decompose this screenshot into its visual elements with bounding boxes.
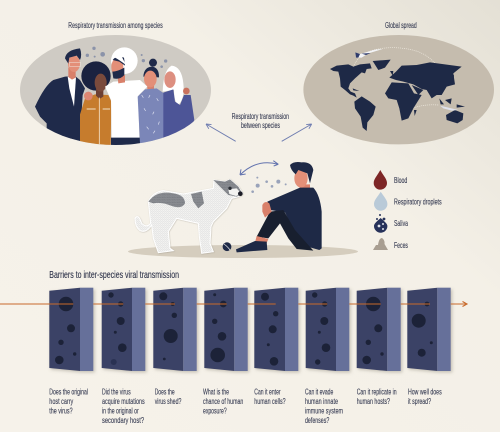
person: woman with bun	[138, 59, 164, 143]
legend: blood: Blood	[394, 175, 407, 185]
barrier 5	[254, 288, 298, 371]
question 2: Did the virus	[102, 386, 131, 396]
person: man in suit	[35, 48, 85, 141]
barrier 6	[306, 288, 349, 371]
arrow: to map panel	[282, 124, 312, 141]
question 8: How well does	[408, 386, 442, 396]
question 2: in the original or	[102, 406, 139, 416]
legend: respiratory droplets: Respiratory droplets	[394, 196, 442, 206]
question 7: Can it replicate in	[357, 386, 397, 396]
question 4: exposure?	[203, 406, 227, 416]
legend	[373, 170, 442, 250]
question 1: Does the original	[49, 386, 88, 396]
man and droplets	[236, 161, 322, 252]
heading: respiratory transmission between species: Respiratory transmission	[232, 111, 289, 121]
question 6: immune system	[305, 406, 343, 416]
question 1: the virus?	[49, 406, 73, 416]
barrier 2	[102, 288, 145, 371]
question 3: virus shed?	[155, 396, 182, 406]
plane: north	[355, 49, 383, 58]
barrier 8	[407, 288, 451, 371]
question 3	[155, 386, 182, 406]
heading: respiratory transmission between species	[232, 111, 289, 130]
question 2: acquire mutations	[102, 396, 145, 406]
man sitting	[236, 162, 322, 252]
question 2: secondary host?	[102, 415, 144, 425]
double arrow	[240, 161, 278, 175]
orange line: first segment	[0, 303, 50, 305]
orange transmission arrow	[49, 302, 467, 306]
legend: feces: Feces	[394, 240, 408, 250]
barrier 1	[49, 288, 93, 371]
plane: south	[440, 106, 458, 111]
heading: barriers: Barriers to inter-species viral transmission	[49, 269, 179, 281]
heading: global spread: Global spread	[385, 20, 417, 30]
question 6	[305, 386, 343, 425]
ball	[223, 242, 231, 251]
heading: respiratory transmission between species: between species	[241, 120, 280, 130]
question 5	[254, 386, 286, 406]
panel: global spread map	[303, 35, 494, 144]
person: woman with white hair	[163, 66, 194, 142]
arrow: to people panel	[206, 124, 236, 141]
question 5: human cells?	[254, 396, 286, 406]
question 8	[408, 386, 442, 406]
legend: saliva: Saliva	[394, 218, 408, 228]
flight routes	[353, 48, 438, 118]
question 6: Can it evade	[305, 386, 333, 396]
droplets	[251, 177, 287, 193]
question 4: chance of human	[203, 396, 243, 406]
heading: respiratory transmission among species: Respiratory transmission among species	[68, 20, 163, 30]
person: woman with afro	[80, 61, 111, 147]
person: man with white turban	[105, 47, 147, 146]
panel: people among species	[20, 35, 211, 147]
barrier 7	[357, 288, 401, 371]
droplets among people	[86, 47, 167, 68]
question 4	[203, 386, 243, 416]
ground shadow	[128, 245, 358, 258]
question 1	[49, 386, 88, 416]
world map	[330, 60, 465, 131]
question 5: Can it enter	[254, 386, 281, 396]
question 3: Does the	[155, 386, 175, 396]
question 4: What is the	[203, 386, 229, 396]
question 1: host carry	[49, 396, 74, 406]
barrier 4	[204, 288, 248, 371]
question 6: defenses?	[305, 415, 329, 425]
question 8: it spread?	[408, 396, 431, 406]
question 2	[102, 386, 145, 425]
question 6: human innate	[305, 396, 338, 406]
question 7: human hosts?	[357, 396, 390, 406]
barrier 3	[153, 288, 197, 371]
plane tail	[355, 52, 371, 58]
question 7	[357, 386, 397, 406]
dog	[135, 179, 243, 253]
